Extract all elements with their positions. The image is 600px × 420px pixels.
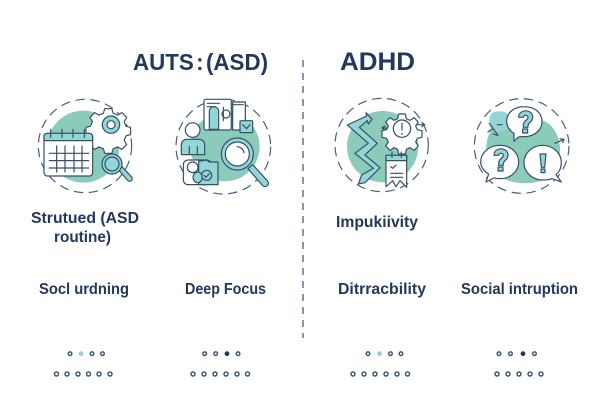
icon: person, documents and large magnifier bbox=[176, 99, 271, 194]
label: social interruption: Social intruption bbox=[461, 281, 578, 298]
question bubble top bbox=[507, 107, 542, 141]
gear bbox=[86, 109, 131, 153]
zigzag arrow bbox=[347, 113, 380, 184]
label: impulsivity: Impukiivity bbox=[336, 214, 418, 231]
label: distractibility: Ditrracbility bbox=[338, 281, 426, 298]
label: structured routine bbox=[31, 210, 139, 246]
heading: autism: AUTS : (ASD) bbox=[133, 49, 268, 75]
documents bbox=[204, 99, 253, 133]
large magnifier bbox=[221, 138, 268, 187]
dots: column 2 bbox=[191, 351, 250, 376]
arrows bbox=[488, 123, 502, 135]
checklist ribbon bbox=[386, 152, 407, 187]
warning gear bbox=[382, 114, 425, 154]
person bbox=[181, 123, 205, 155]
label: deep focus: Deep Focus bbox=[185, 281, 266, 298]
exclamation bubble right bbox=[524, 145, 561, 182]
icon: zigzag arrow, warning gear and checklist bbox=[335, 98, 428, 192]
center divider bbox=[302, 60, 304, 338]
magnifier bbox=[102, 154, 132, 181]
icon: calendar, gear and magnifier bbox=[38, 99, 132, 193]
calendar bbox=[44, 129, 93, 176]
label: structured routine: routine) bbox=[54, 229, 111, 246]
profile card bbox=[183, 160, 218, 185]
dots: column 4 bbox=[495, 351, 543, 376]
dots: column 3 bbox=[351, 351, 410, 376]
label: social understanding: Socl urdning bbox=[39, 281, 129, 298]
question bubble left bbox=[481, 145, 519, 182]
dots: column 1 bbox=[54, 351, 112, 376]
icon: speech bubbles with question marks bbox=[474, 99, 569, 193]
label: structured routine: Strutued (ASD bbox=[31, 210, 139, 227]
heading: ADHD: ADHD bbox=[340, 48, 415, 76]
